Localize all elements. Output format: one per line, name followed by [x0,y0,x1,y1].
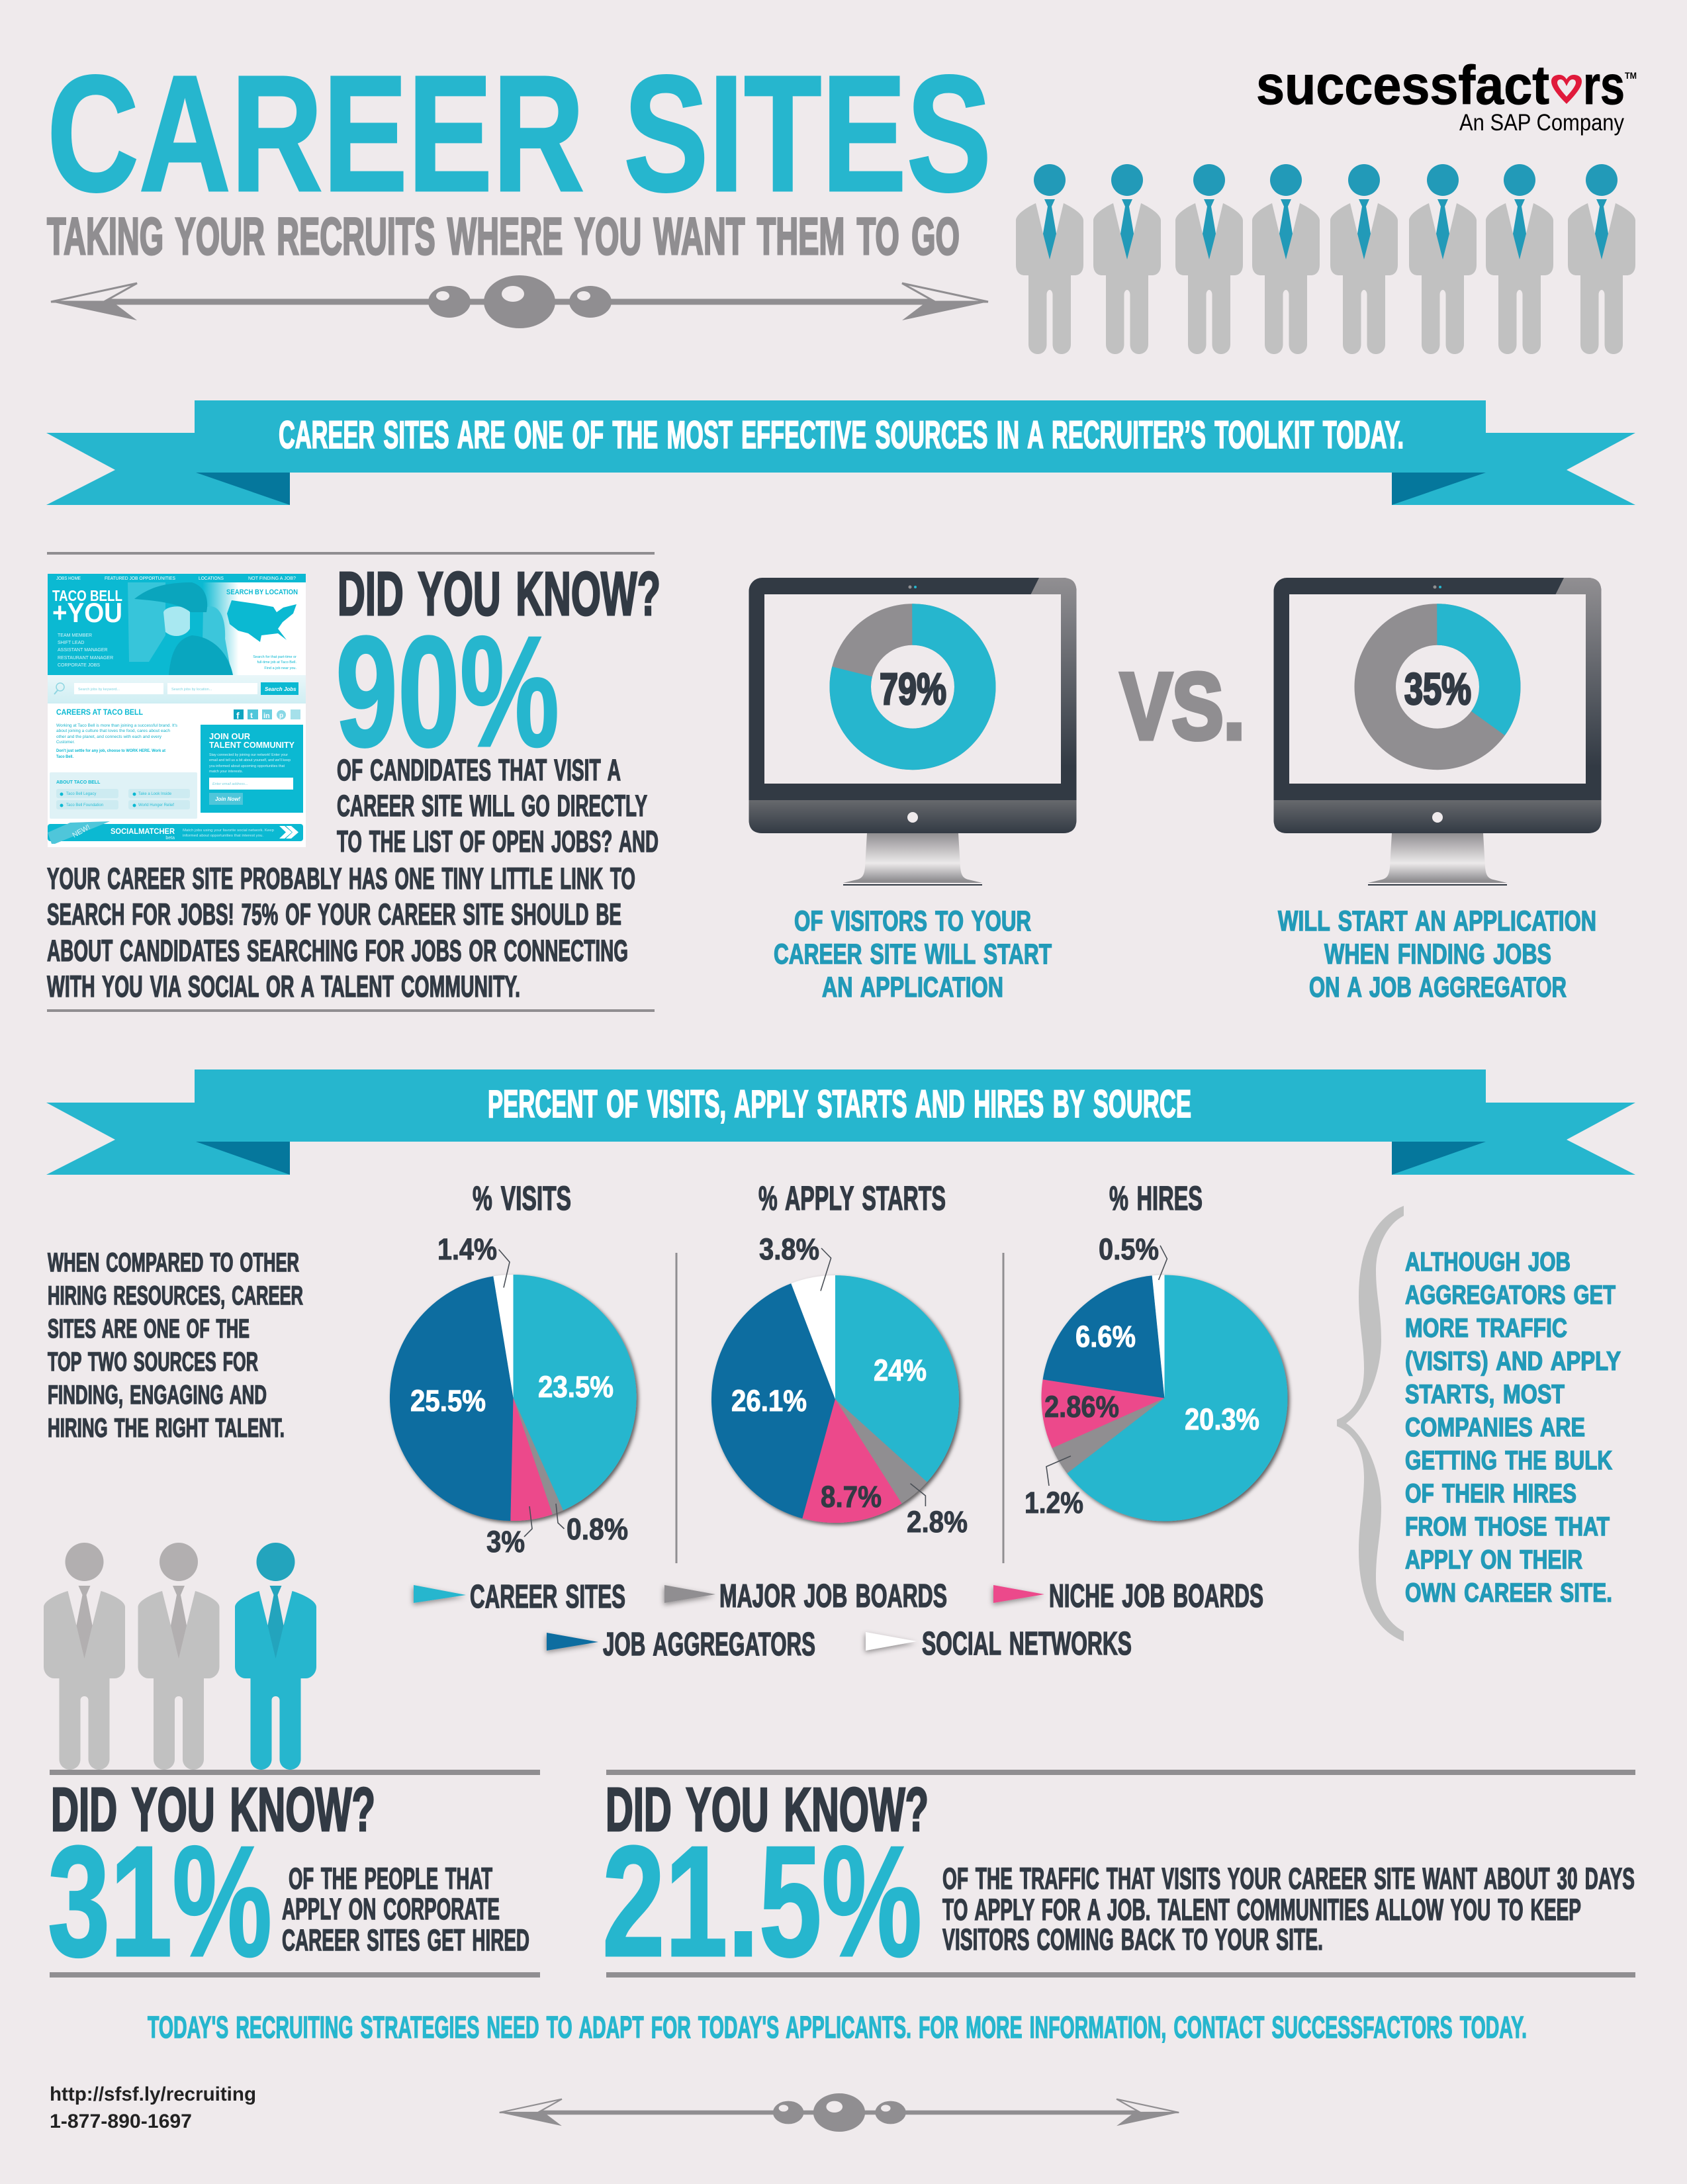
heading: did you know: DID YOU KNOW? [338,559,661,628]
ribbon: percent of visits [46,1069,1635,1175]
did you know panel: 21.5%: VISITORS COMING BACK TO YOUR SITE. [942,1923,1323,1956]
pie chart: hires: 2.86% [1044,1390,1119,1424]
pie chart: visits: 1.4% [437,1232,497,1266]
website screenshot: JOBS HOME [56,575,81,581]
website screenshot: Join Now! [215,796,241,802]
website screenshot: TACO BELL [52,587,122,604]
website screenshot: f [236,710,240,721]
text block: although job aggregators: GETTING THE BULK [1405,1446,1612,1475]
website screenshot: informed about opportunities that interest you. [183,834,263,838]
legend: SOCIAL NETWORKS [922,1626,1132,1662]
legend: NICHE JOB BOARDS [1049,1578,1263,1614]
statistic: 90%: 90% [336,604,559,780]
website screenshot: t [250,711,253,720]
subtitle: TAKING YOUR RECRUITS WHERE YOU WANT THEM TO GO [47,206,960,265]
website screenshot: Search for that part-time or [253,655,296,659]
people row [1016,164,1635,354]
pie chart: hires: 20.3% [1185,1402,1259,1436]
divider [1002,1253,1005,1563]
pie chart: visits: 23.5% [538,1370,614,1404]
website screenshot: JOIN OUR [209,731,251,741]
text block: although job aggregators: FROM THOSE THAT [1405,1512,1610,1541]
caption: 35%: WHEN FINDING JOBS [1324,938,1551,970]
person: gray left [44,1543,125,1770]
donut chart: 35%: 35% [1404,664,1471,714]
website screenshot: RESTAURANT MANAGER [58,656,113,660]
text block: although job aggregators: OWN CAREER SITE. [1405,1578,1612,1608]
legend: CAREER SITES [470,1579,625,1615]
monitor: 79% [749,578,1076,886]
pie chart: hires: 1.2% [1025,1486,1083,1520]
title: CAREER SITES [47,41,991,226]
website screenshot: p [279,712,283,719]
caption: 79%: OF VISITORS TO YOUR [794,905,1031,937]
caption: 79%: AN APPLICATION [822,972,1003,1003]
text block: 90% description: ABOUT CANDIDATES SEARCHING FOR JOBS OR CONNECTING [47,934,628,968]
website screenshot: Search jobs by keyword... [78,688,120,692]
website screenshot: Enter email address... [212,782,248,786]
website screenshot: about joining a culture that loves the food, cares about each [56,729,170,733]
donut chart: 35% [1375,624,1500,749]
text block: when compared: FINDING, ENGAGING AND [48,1381,267,1410]
text block: although job aggregators: MORE TRAFFIC [1405,1314,1567,1343]
pie chart: apply starts [711,1179,968,1539]
website screenshot: SHIFT LEAD [58,641,84,645]
heading: apply starts: % APPLY STARTS [758,1179,946,1217]
website screenshot: Taco Bell. [56,755,73,759]
website screenshot: Taco Bell Foundation [66,803,103,807]
text block: although job aggregators: OF THEIR HIRES [1405,1479,1576,1508]
did you know panel: 31%: DID YOU KNOW? [51,1775,375,1844]
website screenshot: Don't just settle for any job, choose to WORK HERE. Work at [56,749,165,753]
text block: 90% description [47,753,659,1003]
text block: although job aggregators: (VISITS) AND APPLY [1405,1347,1621,1376]
website screenshot: Stay connected by joining our network! Enter your [209,753,288,757]
website screenshot: NOT FINDING A JOB? [248,575,296,581]
website screenshot: match your interests. [209,770,243,774]
heading: hires: % HIRES [1109,1179,1203,1217]
did you know panel: 31%: 31% [48,1814,272,1989]
logo: successfactors [1256,54,1637,136]
text block: when compared [48,1248,303,1443]
pie chart: apply starts: 3.8% [759,1232,819,1266]
caption: 79%: CAREER SITE WILL START [774,938,1052,970]
text block: although job aggregators: STARTS, MOST [1405,1380,1565,1409]
website screenshot: in [263,712,270,720]
website screenshot: SEARCH BY LOCATION [226,588,298,596]
did you know panel: 21.5%: DID YOU KNOW? [606,1775,929,1844]
caption: 79% [774,905,1052,1003]
pie chart: visits [390,1179,637,1559]
text block: when compared: HIRING THE RIGHT TALENT. [48,1414,285,1443]
versus label: VS. [1120,654,1245,759]
icon: heart [1551,73,1582,105]
did you know panel: 21.5%: 21.5% [602,1814,922,1989]
website screenshot: you informed about upcoming opportunities that [209,764,285,768]
pie chart: visits: 0.8% [567,1512,628,1546]
text block: 90% description: CAREER SITE WILL GO DIRECTLY [337,789,647,823]
pie chart: apply starts: 26.1% [731,1384,807,1418]
pie chart: hires: 6.6% [1075,1320,1136,1353]
website screenshot: Find a job near you. [264,666,296,670]
website screenshot: email and tell us a bit about yourself, and we'll keep [209,758,291,762]
website screenshot: Taco Bell Legacy [66,792,96,796]
heading: visits: % VISITS [473,1179,571,1217]
website screenshot: NEW! [71,823,91,840]
brace [1337,1206,1404,1641]
website screenshot: other and the planet, and connects with each and every [56,735,161,739]
arrow divider: bottom [500,2093,1179,2132]
website screenshot: Match jobs using your favorite social network. Keep [183,829,274,833]
ribbon: percent of visits: PERCENT OF VISITS, APPLY STARTS AND HIRES BY SOURCE [488,1083,1191,1126]
contact details [50,2083,256,2132]
text block: 90% description: WITH YOU VIA SOCIAL OR A TALENT COMMUNITY. [47,970,520,1003]
pie chart: visits: 25.5% [410,1384,486,1418]
pie chart: apply starts: 2.8% [907,1505,968,1539]
logo: successfactors: An SAP Company [1459,110,1624,136]
website screenshot: CORPORATE JOBS [58,663,100,668]
text block: although job aggregators: COMPANIES ARE [1405,1413,1585,1442]
text block: when compared: TOP TWO SOURCES FOR [48,1347,258,1377]
website screenshot: TEAM MEMBER [58,633,92,638]
text block: when compared: WHEN COMPARED TO OTHER [48,1248,299,1277]
did you know panel: 21.5% [602,1770,1635,1989]
logo: successfactors: TM [1625,70,1637,81]
website screenshot: Working at Taco Bell is more than joining a successful brand. It's [56,724,177,728]
website screenshot: full-time job at Taco Bell. [257,660,296,664]
arrow divider: top [51,275,988,328]
did you know panel: 31%: APPLY ON CORPORATE [282,1892,500,1926]
pie chart: visits: 3% [486,1525,525,1559]
website screenshot [48,574,306,847]
text block: 90% description: SEARCH FOR JOBS! 75% OF YOUR CAREER SITE SHOULD BE [47,897,621,931]
donut chart: 79% [850,624,975,749]
website screenshot: Search Jobs [265,686,296,692]
logo: successfactors: o [1555,54,1575,116]
pie chart: hires: 0.5% [1099,1232,1159,1266]
pie chart: apply starts: 8.7% [821,1480,882,1514]
website screenshot: CAREERS AT TACO BELL [56,709,143,717]
contact details: http://sfsf.ly/recruiting [50,2083,256,2105]
logo: successfactors: rs [1583,54,1625,116]
text block: when compared: SITES ARE ONE OF THE [48,1314,250,1343]
logo: successfactors: successfact [1256,54,1549,116]
person: teal [235,1543,316,1770]
website screenshot: Search jobs by location... [171,688,212,692]
caption: 35%: ON A JOB AGGREGATOR [1309,972,1567,1003]
text block: 90% description: YOUR CAREER SITE PROBABLY HAS ONE TINY LITTLE LINK TO [47,862,635,895]
website screenshot: TALENT COMMUNITY [209,740,295,750]
text block: although job aggregators [1405,1248,1621,1608]
text block: when compared: HIRING RESOURCES, CAREER [48,1281,303,1310]
contact details: 1-877-890-1697 [50,2111,192,2132]
website screenshot: World Hunger Relief [138,803,174,807]
monitor: 35% [1273,578,1602,886]
text block: 90% description: TO THE LIST OF OPEN JOBS? AND [337,825,659,858]
text block: although job aggregators: AGGREGATORS GET [1405,1281,1616,1310]
did you know panel: 31%: OF THE PEOPLE THAT [289,1862,492,1895]
legend [414,1578,1263,1662]
website screenshot: SOCIALMATCHER [111,827,175,836]
divider [675,1253,678,1563]
text block: 90% description: OF CANDIDATES THAT VISIT A [337,753,621,787]
ribbon: career sites effective [46,400,1635,505]
did you know panel: 31%: CAREER SITES GET HIRED [282,1923,529,1957]
did you know panel: 90% [47,552,661,1012]
text block: although job aggregators: ALTHOUGH JOB [1405,1248,1571,1277]
pie chart: hires [1025,1179,1288,1521]
caption: 35% [1278,905,1596,1003]
website screenshot: ABOUT TACO BELL [56,780,101,785]
website screenshot: FEATURED JOB OPPORTUNITIES [105,575,175,581]
legend: MAJOR JOB BOARDS [719,1578,947,1614]
pie chart: apply starts: 24% [874,1353,927,1387]
website screenshot: +YOU [52,597,122,628]
donut chart: 79%: 79% [880,664,946,714]
website screenshot: Customer. [56,741,75,745]
website screenshot: beta [165,836,175,841]
website screenshot: ASSISTANT MANAGER [58,648,108,653]
text block: although job aggregators: APPLY ON THEIR [1405,1545,1582,1574]
website screenshot: LOCATIONS [199,575,224,581]
person: gray middle [138,1543,220,1770]
did you know panel: 31% [48,1770,540,1989]
legend: JOB AGGREGATORS [603,1627,815,1662]
website screenshot: Take a Look Inside [138,792,172,796]
